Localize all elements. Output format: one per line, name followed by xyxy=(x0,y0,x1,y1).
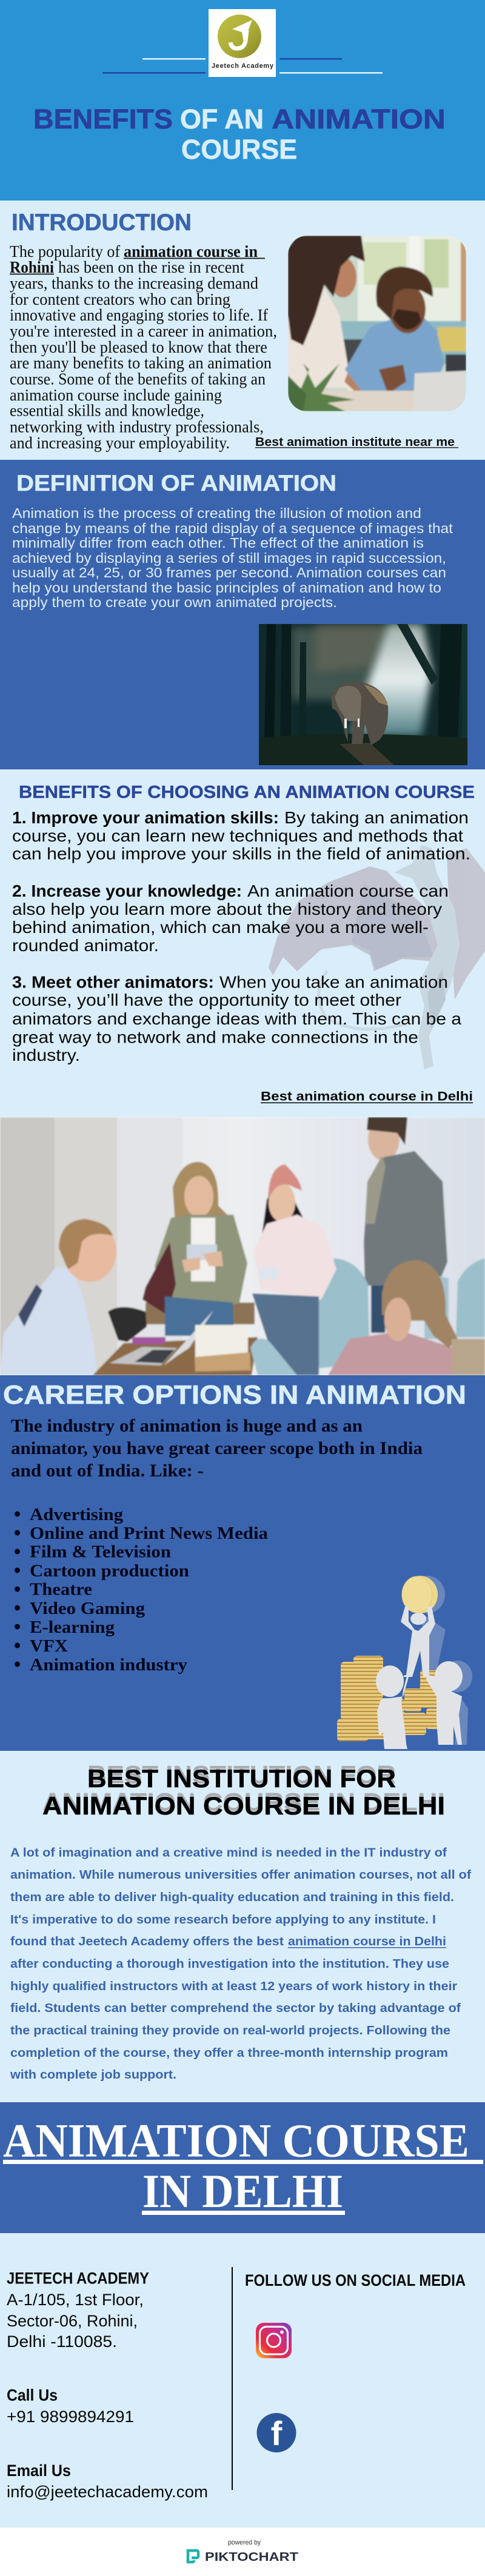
black chair xyxy=(108,1307,147,1342)
link: best animation course in delhi: Best animation course in Delhi xyxy=(261,1089,473,1104)
woman in front xyxy=(328,1331,470,1375)
title: COURSE xyxy=(181,134,297,165)
book xyxy=(195,1325,248,1360)
photo: students talking in a classroom xyxy=(0,1117,485,1375)
decoration: dragon watermark xyxy=(269,845,485,1069)
text: introduction body: are many benefits to taking an animation xyxy=(10,353,272,372)
text: introduction body: animation course include gaining xyxy=(10,385,222,404)
list: career options: Online and Print News Media xyxy=(30,1524,269,1543)
list: career options: Video Gaming xyxy=(30,1599,146,1618)
text: introduction body: and increasing your employability. xyxy=(10,433,230,452)
text: address: Sector-06, Rohini, xyxy=(7,2312,138,2330)
woman xyxy=(288,287,354,391)
panel: introduction xyxy=(0,201,485,460)
text: introduction body: years, thanks to the increasing demand xyxy=(10,274,258,292)
photo: elephant in a forest xyxy=(259,624,467,765)
man in sweater xyxy=(364,1239,388,1260)
text: benefit 1: 1. Improve your animation skills: xyxy=(12,808,279,827)
text: benefit 3: industry. xyxy=(12,1046,80,1064)
text: institution body: found that Jeetech Academy offers the best xyxy=(10,1935,284,1948)
text: email: Email Us xyxy=(7,2461,71,2480)
text: institution body: A lot of imagination and a creative mind is needed in the IT industry of xyxy=(10,1847,447,1860)
logo xyxy=(209,9,276,77)
text: address xyxy=(7,2269,149,2351)
heading: best institution: BEST INSTITUTION FOR xyxy=(87,1761,396,1788)
text: benefit 2 xyxy=(12,881,449,955)
text: introduction body: essential skills and knowledge, xyxy=(10,401,204,419)
title xyxy=(33,104,446,165)
heading: definition of animation: DEFINITION OF ANIMATION xyxy=(16,471,336,496)
photo: two colleagues at a laptop xyxy=(288,236,466,411)
footer: powered by piktochart: powered by xyxy=(228,2539,261,2546)
text: career intro xyxy=(11,1416,423,1481)
top figure xyxy=(401,1607,435,1677)
text: phone: Call Us xyxy=(7,2386,58,2404)
text: phone xyxy=(7,2386,134,2426)
list: career options xyxy=(15,1505,269,1675)
text: address: Delhi -110085. xyxy=(7,2332,117,2351)
list: career options: Cartoon production xyxy=(30,1561,189,1581)
heading: best institution: BEST INSTITUTION FOR xyxy=(87,1764,396,1793)
text: benefit 3: course, you’ll have the opportunity to meet other xyxy=(12,991,401,1009)
footer: powered by piktochart: PIKTOCHART xyxy=(205,2551,298,2564)
heading: best institution: ANIMATION COURSE IN DELHI xyxy=(42,1791,445,1820)
text: institution body: with complete job support. xyxy=(10,2068,176,2082)
text: introduction body: then you'll be pleased to know that there xyxy=(10,337,267,356)
panel: best institution for animation course in delhi xyxy=(0,1751,485,2102)
text: benefit 3: animators and exchange ideas with them. This can be a xyxy=(12,1009,462,1028)
title: ANIMATION xyxy=(272,104,446,134)
laptop xyxy=(110,1347,177,1366)
chairs xyxy=(318,1258,370,1369)
text: phone: +91 9899894291 xyxy=(7,2408,134,2426)
text: career intro: The industry of animation is huge and as an xyxy=(11,1416,363,1436)
text: introduction body: animation course in xyxy=(124,242,258,261)
text: introduction body: for content creators who can bring xyxy=(10,290,230,308)
text: address: JEETECH ACADEMY xyxy=(7,2269,149,2288)
man xyxy=(345,318,444,397)
text: institution body: the practical training they provide on real-world projects. Following the xyxy=(10,2024,450,2037)
text: benefit 1: course, you can learn new techniques and methods that xyxy=(12,826,463,845)
text: institution body: them are able to deliver high-quality education and training in this field. xyxy=(10,1891,454,1904)
panel: career options in animation xyxy=(0,1375,485,1751)
girl with headband xyxy=(258,1190,303,1269)
girl with jacket xyxy=(173,1162,230,1254)
text: benefit 1: can help you improve your skills in the field of animation. xyxy=(12,845,470,863)
heading: best institution xyxy=(42,1761,445,1820)
text: benefit 1: By taking an animation xyxy=(284,808,469,827)
text: introduction body: Rohini xyxy=(10,257,54,276)
text: institution body: field. Students can better comprehend the sector by taking advantage of xyxy=(10,2002,461,2015)
heading: animation course in delhi xyxy=(3,2114,483,2217)
panel: animation course in delhi banner xyxy=(0,2102,485,2233)
right figure xyxy=(426,1661,463,1745)
text: institution body xyxy=(10,1847,471,2082)
panel: header xyxy=(0,0,485,201)
logo: Jeetech Academy xyxy=(212,62,274,70)
text: introduction body xyxy=(10,242,277,452)
text: email: info@jeetechacademy.com xyxy=(7,2483,208,2501)
heading: introduction: INTRODUCTION xyxy=(12,210,192,236)
text: institution body: It's imperative to do some research before applying to any institute. I xyxy=(10,1913,436,1927)
text: institution body: animation. While numerous universities offer animation courses, not all of xyxy=(10,1868,471,1882)
text: benefit 3 xyxy=(12,973,462,1064)
list: career options: Film & Television xyxy=(30,1542,171,1562)
text: definition body: usually at 24, 25, or 30 frames per second. Animation courses can xyxy=(12,565,446,580)
heading: animation course in delhi: IN DELHI xyxy=(142,2165,343,2217)
list: career options: E-learning xyxy=(30,1618,115,1637)
title: OF AN xyxy=(180,104,264,134)
panel: contact and social xyxy=(0,2233,485,2528)
text: introduction body: innovative and engaging stories to life. If xyxy=(10,305,269,324)
text: institution body: highly qualified instructors with at least 12 years of work history in their xyxy=(10,1980,457,1993)
table back xyxy=(146,1303,255,1324)
text: definition body: apply them to create your own animated projects. xyxy=(12,594,337,610)
icon: facebook: f xyxy=(271,2414,283,2452)
man seated xyxy=(0,1266,97,1375)
text: benefit 1 xyxy=(12,808,470,863)
text: benefit 2: also help you learn more about the history and theory xyxy=(12,900,442,918)
text: benefit 2: rounded animator. xyxy=(12,936,159,955)
text: definition body: change by means of the rapid display of a sequence of images that xyxy=(12,520,453,536)
text: definition body: Animation is the process of creating the illusion of motion and xyxy=(12,505,421,521)
icon: piktochart mark xyxy=(188,2551,198,2563)
left figure xyxy=(376,1665,409,1749)
text: benefit 2: 2. Increase your knowledge: xyxy=(12,881,242,900)
text: benefit 3: 3. Meet other animators: xyxy=(12,973,214,991)
title: BENEFITS xyxy=(33,104,173,134)
text: benefit 3: great way to network and make connections in the xyxy=(12,1027,418,1047)
text: career intro: animator, you have great career scope both in India xyxy=(11,1438,423,1458)
text: address: A-1/105, 1st Floor, xyxy=(7,2291,144,2309)
footer: powered by piktochart xyxy=(0,2528,485,2576)
text: benefit 2: behind animation, which can make you a more well- xyxy=(12,918,429,937)
text: introduction body: networking with industry professionals, xyxy=(10,417,264,436)
panel: definition of animation xyxy=(0,460,485,769)
text: benefit 2: An animation course can xyxy=(247,881,449,900)
text: introduction body: you're interested in a career in animation, xyxy=(10,321,277,340)
heading: career options: CAREER OPTIONS IN ANIMATION xyxy=(3,1380,466,1410)
text: email xyxy=(7,2461,208,2501)
icon: instagram xyxy=(256,2323,292,2358)
heading: animation course in delhi: ANIMATION COURSE xyxy=(3,2114,469,2166)
heading: best institution: ANIMATION COURSE IN DELHI xyxy=(42,1787,445,1816)
text: definition body: achieved by displaying a series of still images in rapid succession, xyxy=(12,550,446,566)
shadow copies xyxy=(410,1576,472,1745)
coin xyxy=(403,1576,438,1613)
panel: benefits of choosing an animation course xyxy=(0,769,485,1117)
text: definition body: help you understand the basic principles of animation and how to xyxy=(12,580,441,596)
list: career options: VFX xyxy=(30,1636,68,1656)
text: institution body: completion of the course, they offer a three-month internship program xyxy=(10,2047,448,2060)
icon: facebook xyxy=(257,2413,296,2452)
list: career options: Animation industry xyxy=(30,1655,188,1675)
front chair xyxy=(250,1338,297,1375)
text: introduction body: has been on the rise in recent xyxy=(58,257,244,276)
illustration: figures lifting a coin over coin stacks xyxy=(337,1576,472,1749)
heading: benefits of choosing: BENEFITS OF CHOOSING AN ANIMATION COURSE xyxy=(19,783,475,802)
text: institution body: after conducting a thorough investigation into the institution. They use xyxy=(10,1957,449,1971)
table xyxy=(93,1337,258,1375)
text: career intro: and out of India. Like: - xyxy=(11,1461,204,1481)
list: career options: Theatre xyxy=(30,1580,92,1599)
text: benefit 3: When you take an animation xyxy=(219,973,448,991)
text: introduction body: The popularity of xyxy=(10,242,121,261)
laptop and table xyxy=(321,389,415,411)
text: definition body xyxy=(12,505,453,610)
list: career options: Advertising xyxy=(30,1505,124,1524)
plant xyxy=(300,363,354,411)
text: introduction body: course. Some of the benefits of taking an xyxy=(10,370,266,388)
text: institution body: animation course in Delhi xyxy=(288,1935,446,1948)
text: definition body: minimally differ from each other. The effect of the animation is xyxy=(12,535,424,551)
elephant xyxy=(331,682,388,745)
link: best animation institute near me: Best animation institute near me xyxy=(255,436,455,449)
